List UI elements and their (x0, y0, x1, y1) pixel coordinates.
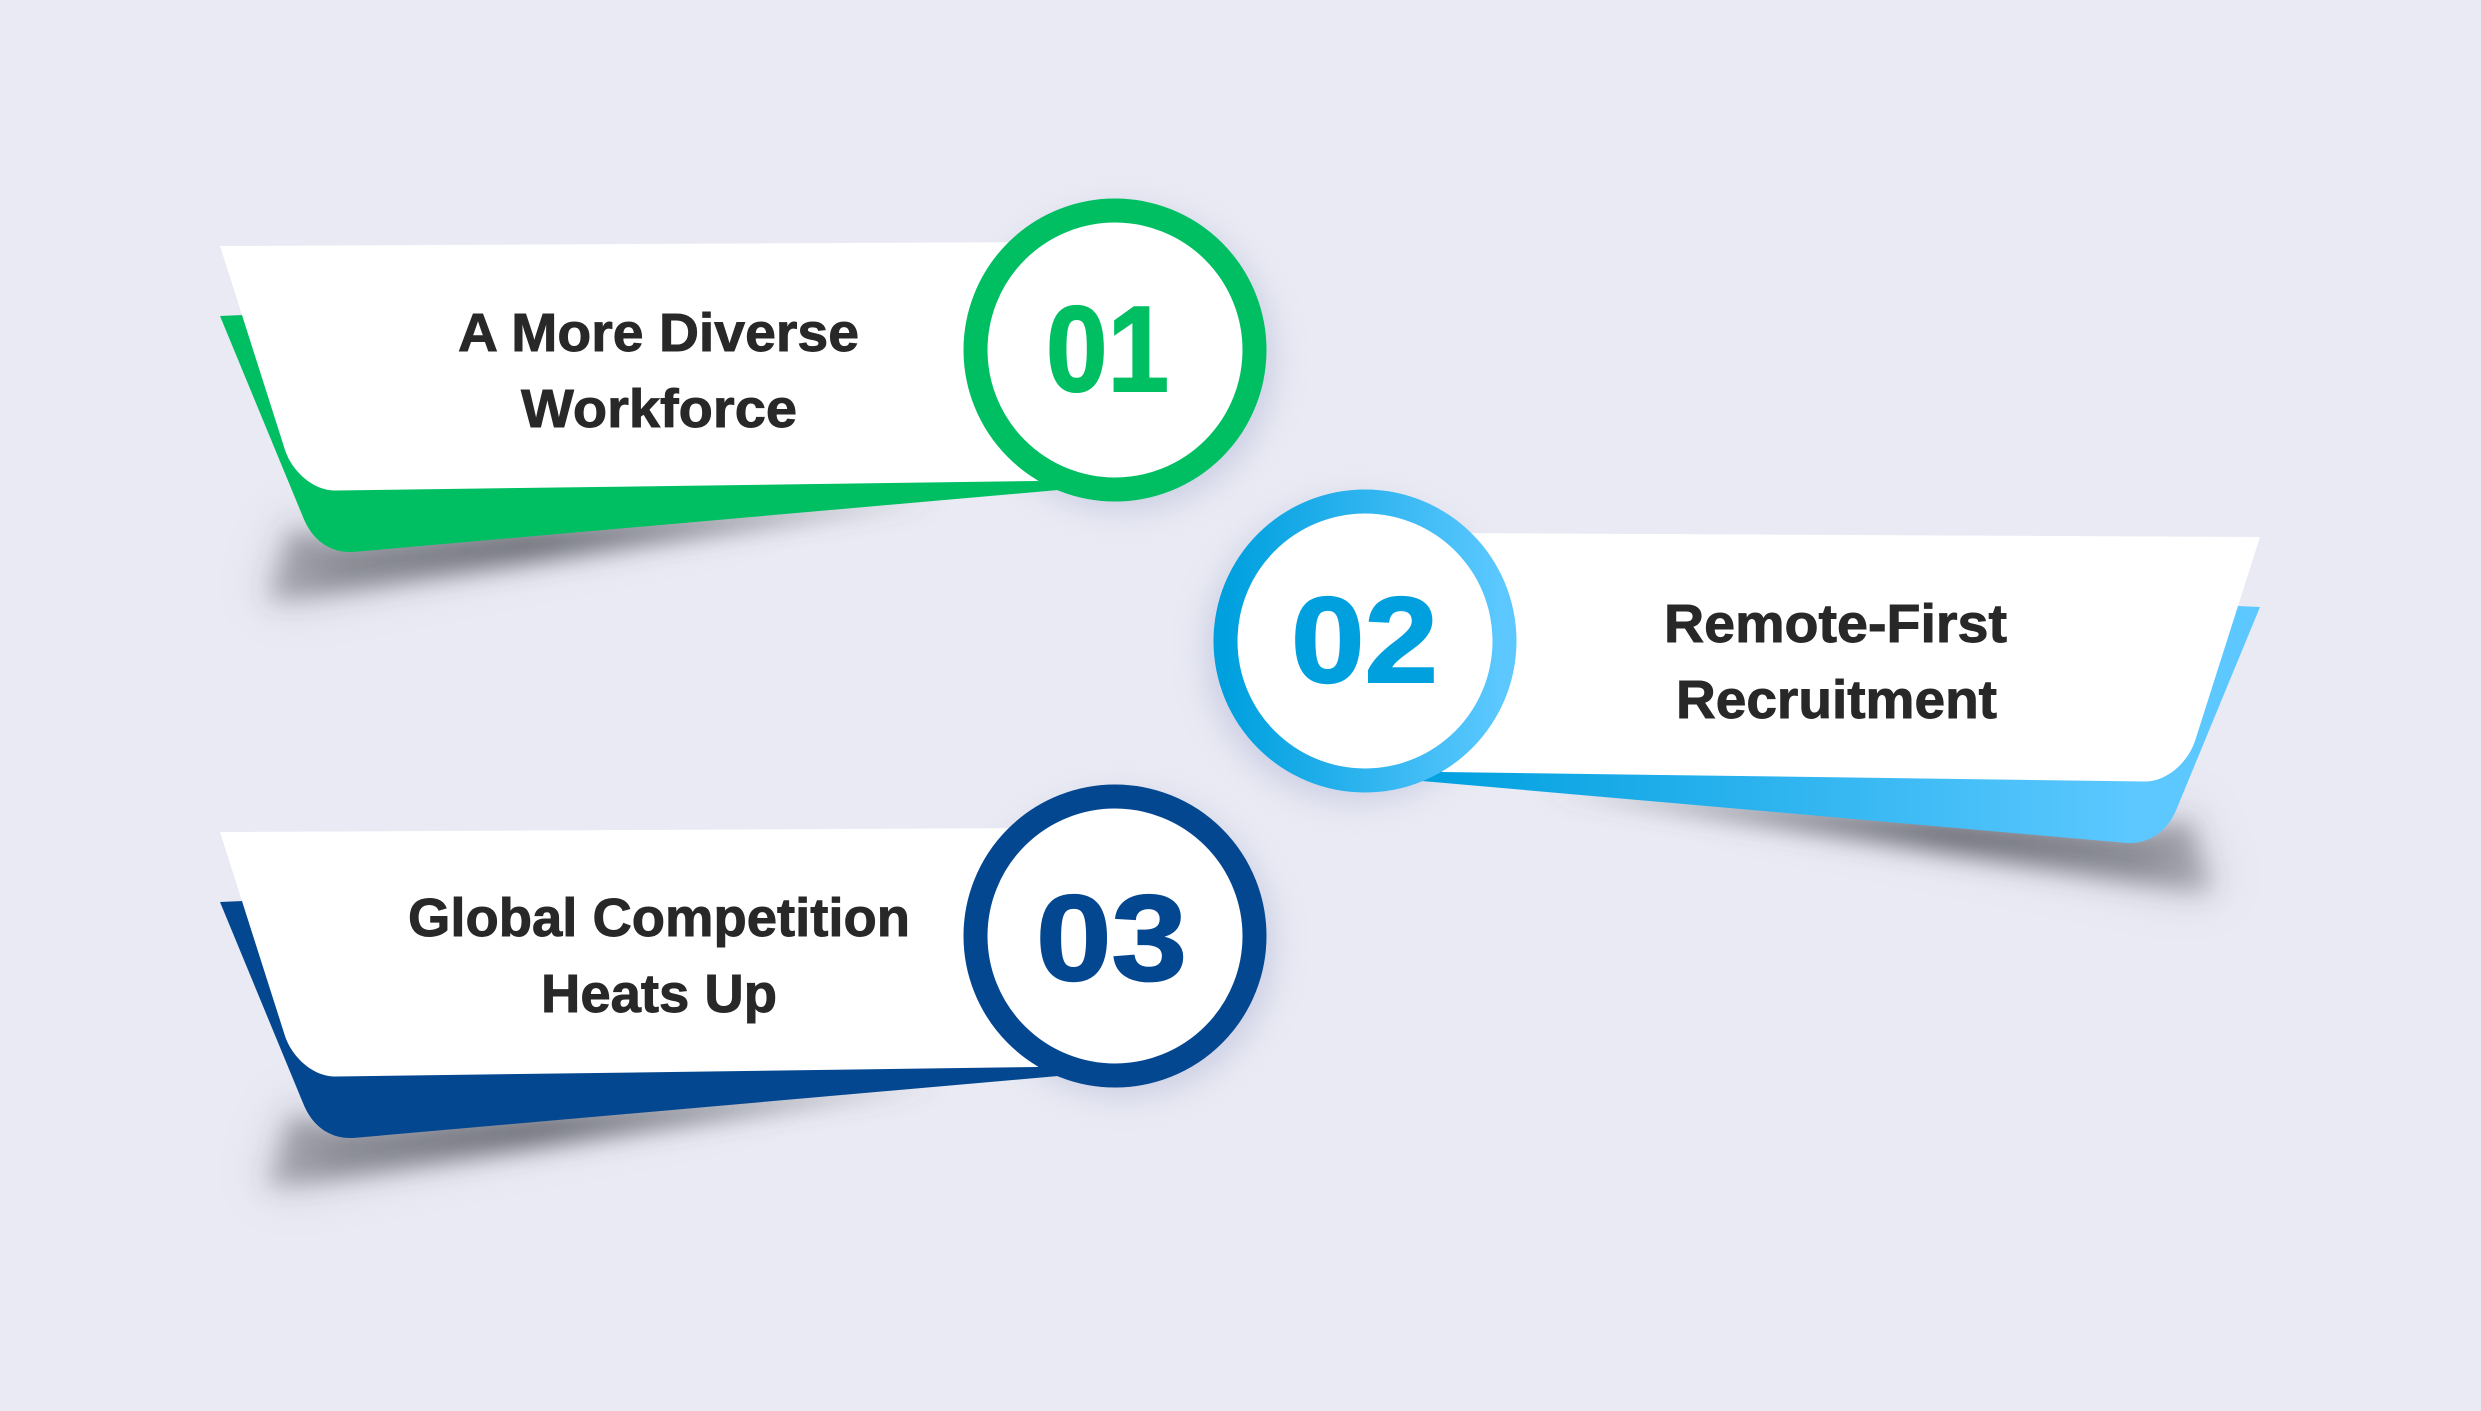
card 02 cast shadow (1540, 789, 2225, 903)
card 01 green back ribbon (220, 315, 1058, 552)
card 01 heading (458, 303, 859, 439)
card 03 number badge (976, 796, 1254, 1076)
card 03 heading: Heats Up (541, 964, 777, 1024)
card 03 heading (408, 888, 910, 1024)
card 02 white panel (1442, 533, 2260, 782)
card 02 heading (1664, 594, 2007, 730)
card 03 number badge: 03 (1036, 870, 1187, 1006)
card 03: Global Competition Heats Up (220, 796, 1274, 1198)
card 03 navy back ribbon (220, 901, 1058, 1138)
card 01 heading: A More Diverse (458, 303, 859, 363)
card 02 blue back ribbon (1422, 606, 2260, 843)
card 01: A More Diverse Workforce (220, 210, 1274, 612)
card 03 white panel (220, 828, 1038, 1077)
card 02 heading: Recruitment (1676, 670, 1997, 730)
card 01 number badge: 01 (1046, 281, 1169, 417)
card 02 number badge: 02 (1291, 572, 1438, 708)
card 02 heading: Remote-First (1664, 594, 2007, 654)
card 02 number badge (1214, 490, 1516, 792)
card 03 heading: Global Competition (408, 888, 910, 948)
card 02 ring shadow (1206, 501, 1506, 801)
card 01 ring shadow (974, 210, 1274, 510)
card 03 ring shadow (974, 796, 1274, 1096)
card 01 heading: Workforce (521, 379, 797, 439)
card 01 white panel (220, 242, 1038, 491)
card 03 cast shadow (255, 1084, 940, 1198)
card 01 cast shadow (255, 498, 940, 612)
card 01 number badge (976, 210, 1254, 490)
card 02: Remote-First Recruitment (1206, 490, 2260, 903)
